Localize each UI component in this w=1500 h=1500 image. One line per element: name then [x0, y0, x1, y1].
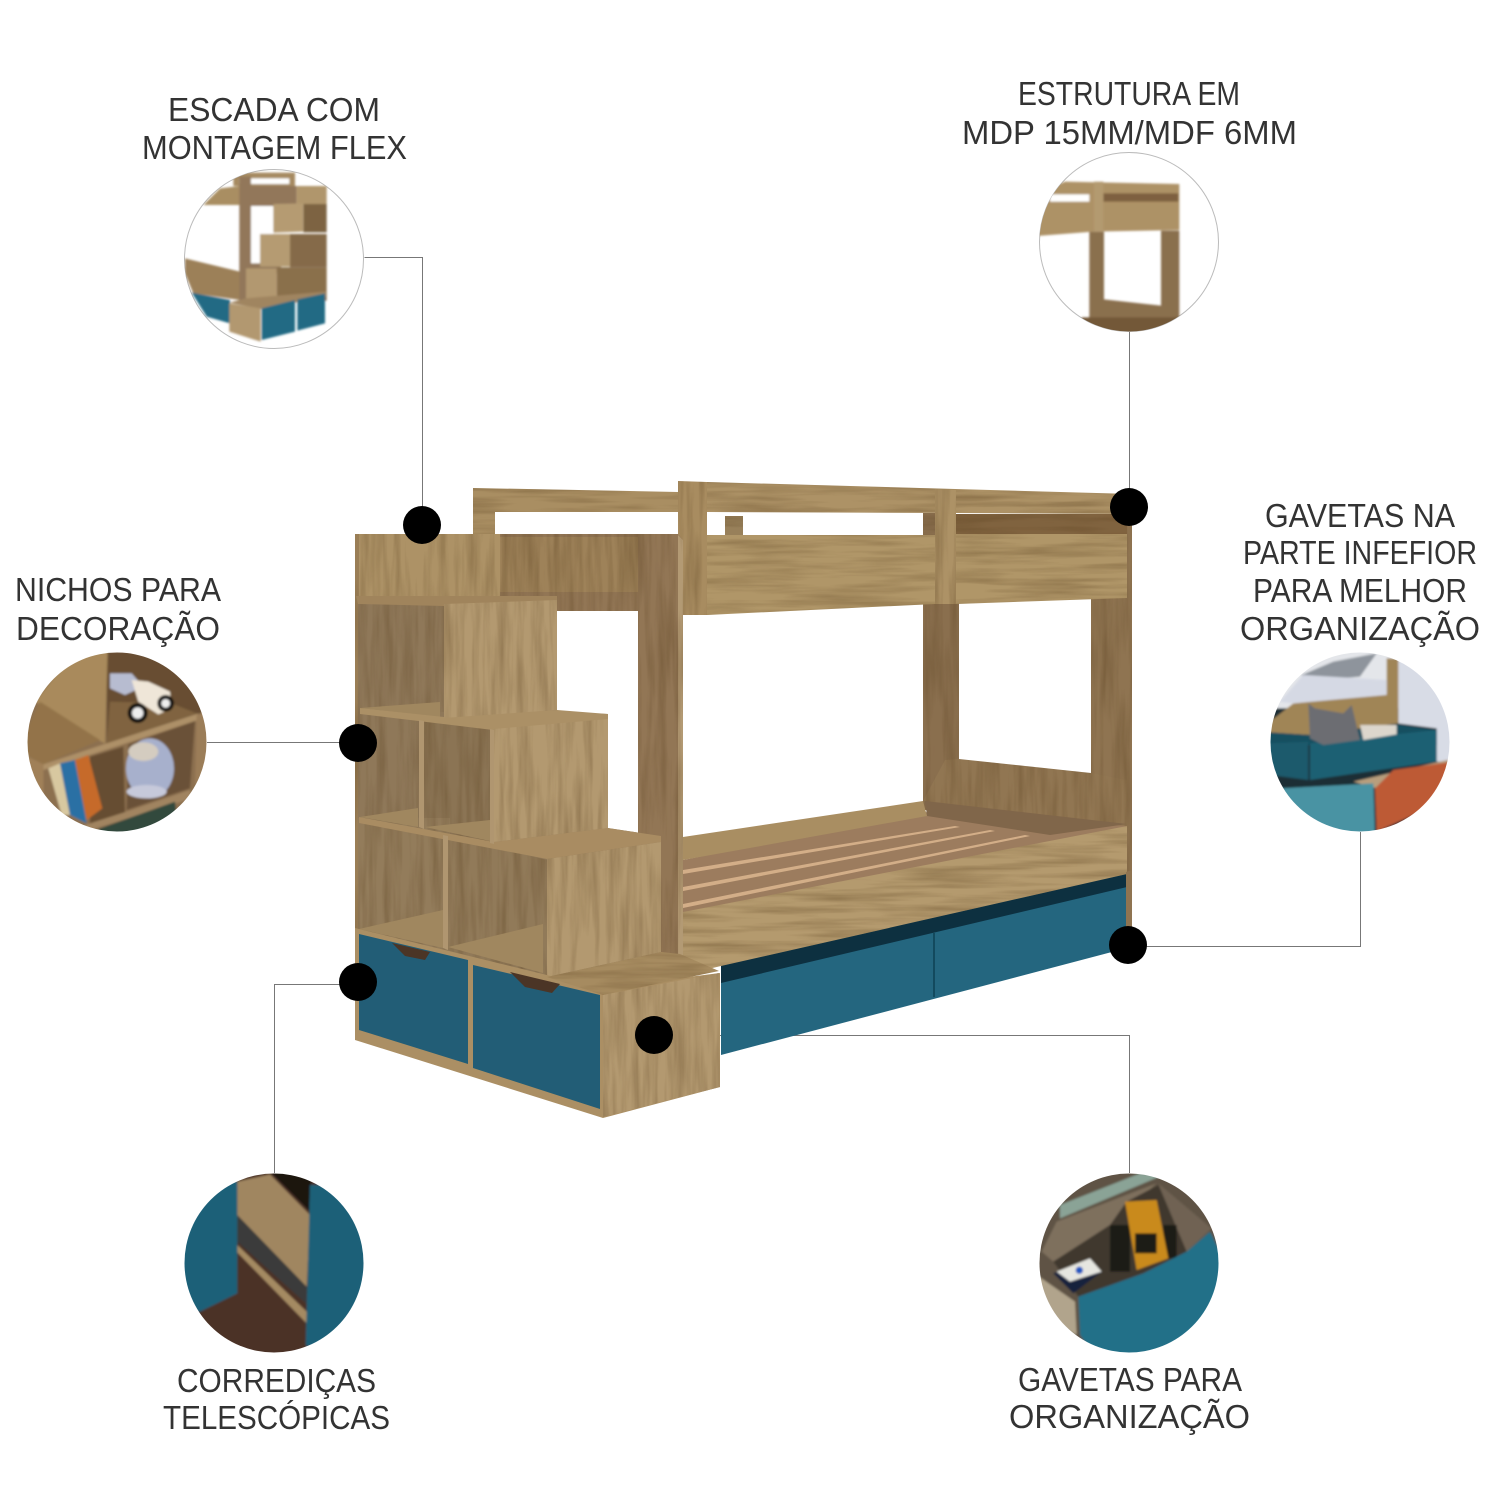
heading: gavetas organização: GAVETAS PARA: [1018, 1361, 1242, 1398]
staircase cabinet: [355, 534, 720, 1118]
callout: nichos: [15, 571, 221, 838]
heading: nichos: [15, 571, 221, 647]
heading: gavetas inferior: ORGANIZAÇÃO: [1240, 610, 1480, 647]
heading: gavetas organização: ORGANIZAÇÃO: [1009, 1398, 1250, 1435]
heading: estrutura: [962, 75, 1297, 151]
callout: gavetas inferior: [1240, 497, 1480, 838]
callout: gavetas organização: [1009, 1168, 1250, 1435]
heading: corrediças: [163, 1362, 390, 1436]
heading: escada: [142, 91, 407, 166]
heading: nichos: NICHOS PARA: [15, 571, 221, 608]
under-bed teal drawers: [721, 868, 1127, 1055]
heading: nichos: DECORAÇÃO: [16, 610, 220, 647]
callout: estrutura: [962, 75, 1297, 337]
detail circle: structure: [1037, 152, 1218, 337]
connector lines: [207, 258, 1360, 1173]
back and niches: [355, 534, 547, 1036]
bunk bed illustration: [355, 481, 1132, 1118]
heading: estrutura: ESTRUTURA EM: [1018, 75, 1240, 112]
heading: escada: MONTAGEM FLEX: [142, 129, 407, 166]
detail circle: telescopic slides: [184, 1174, 364, 1352]
solid cabinet backing: [356, 596, 661, 1000]
upper posts: [678, 481, 1132, 615]
callout: corrediças: [163, 1168, 390, 1436]
heading: escada: ESCADA COM: [168, 91, 380, 128]
step faces: [444, 600, 661, 977]
detail circle: stairs: [184, 170, 364, 348]
detail circle: drawer with toys: [1040, 1174, 1218, 1352]
corner cube: [547, 952, 719, 995]
callout: escada: [142, 91, 407, 348]
upper guard rails: [473, 482, 1132, 615]
shelf edges and dividers: [356, 596, 661, 950]
heading: estrutura: MDP 15MM/MDF 6MM: [962, 114, 1297, 151]
heading: corrediças: TELESCÓPICAS: [163, 1399, 390, 1436]
marker dots: [339, 488, 1148, 1054]
heading: gavetas organização: [1009, 1361, 1250, 1435]
heading: gavetas inferior: PARA MELHOR: [1253, 572, 1467, 609]
heading: corrediças: CORREDIÇAS: [177, 1362, 376, 1399]
heading: gavetas inferior: [1240, 497, 1480, 647]
detail circle: niches: [28, 652, 206, 832]
front side rail: [683, 826, 1127, 975]
right end post edge: [1126, 870, 1132, 947]
detail circle: lower drawers: [1270, 652, 1450, 832]
rear posts and lower headboard: [923, 596, 1132, 880]
lower frame: [355, 928, 720, 1118]
left post and header: [470, 534, 683, 975]
heading: gavetas inferior: GAVETAS NA: [1265, 497, 1455, 534]
slats: [683, 801, 1127, 916]
niche floors: [359, 702, 543, 973]
stair drawers: [359, 934, 600, 1109]
